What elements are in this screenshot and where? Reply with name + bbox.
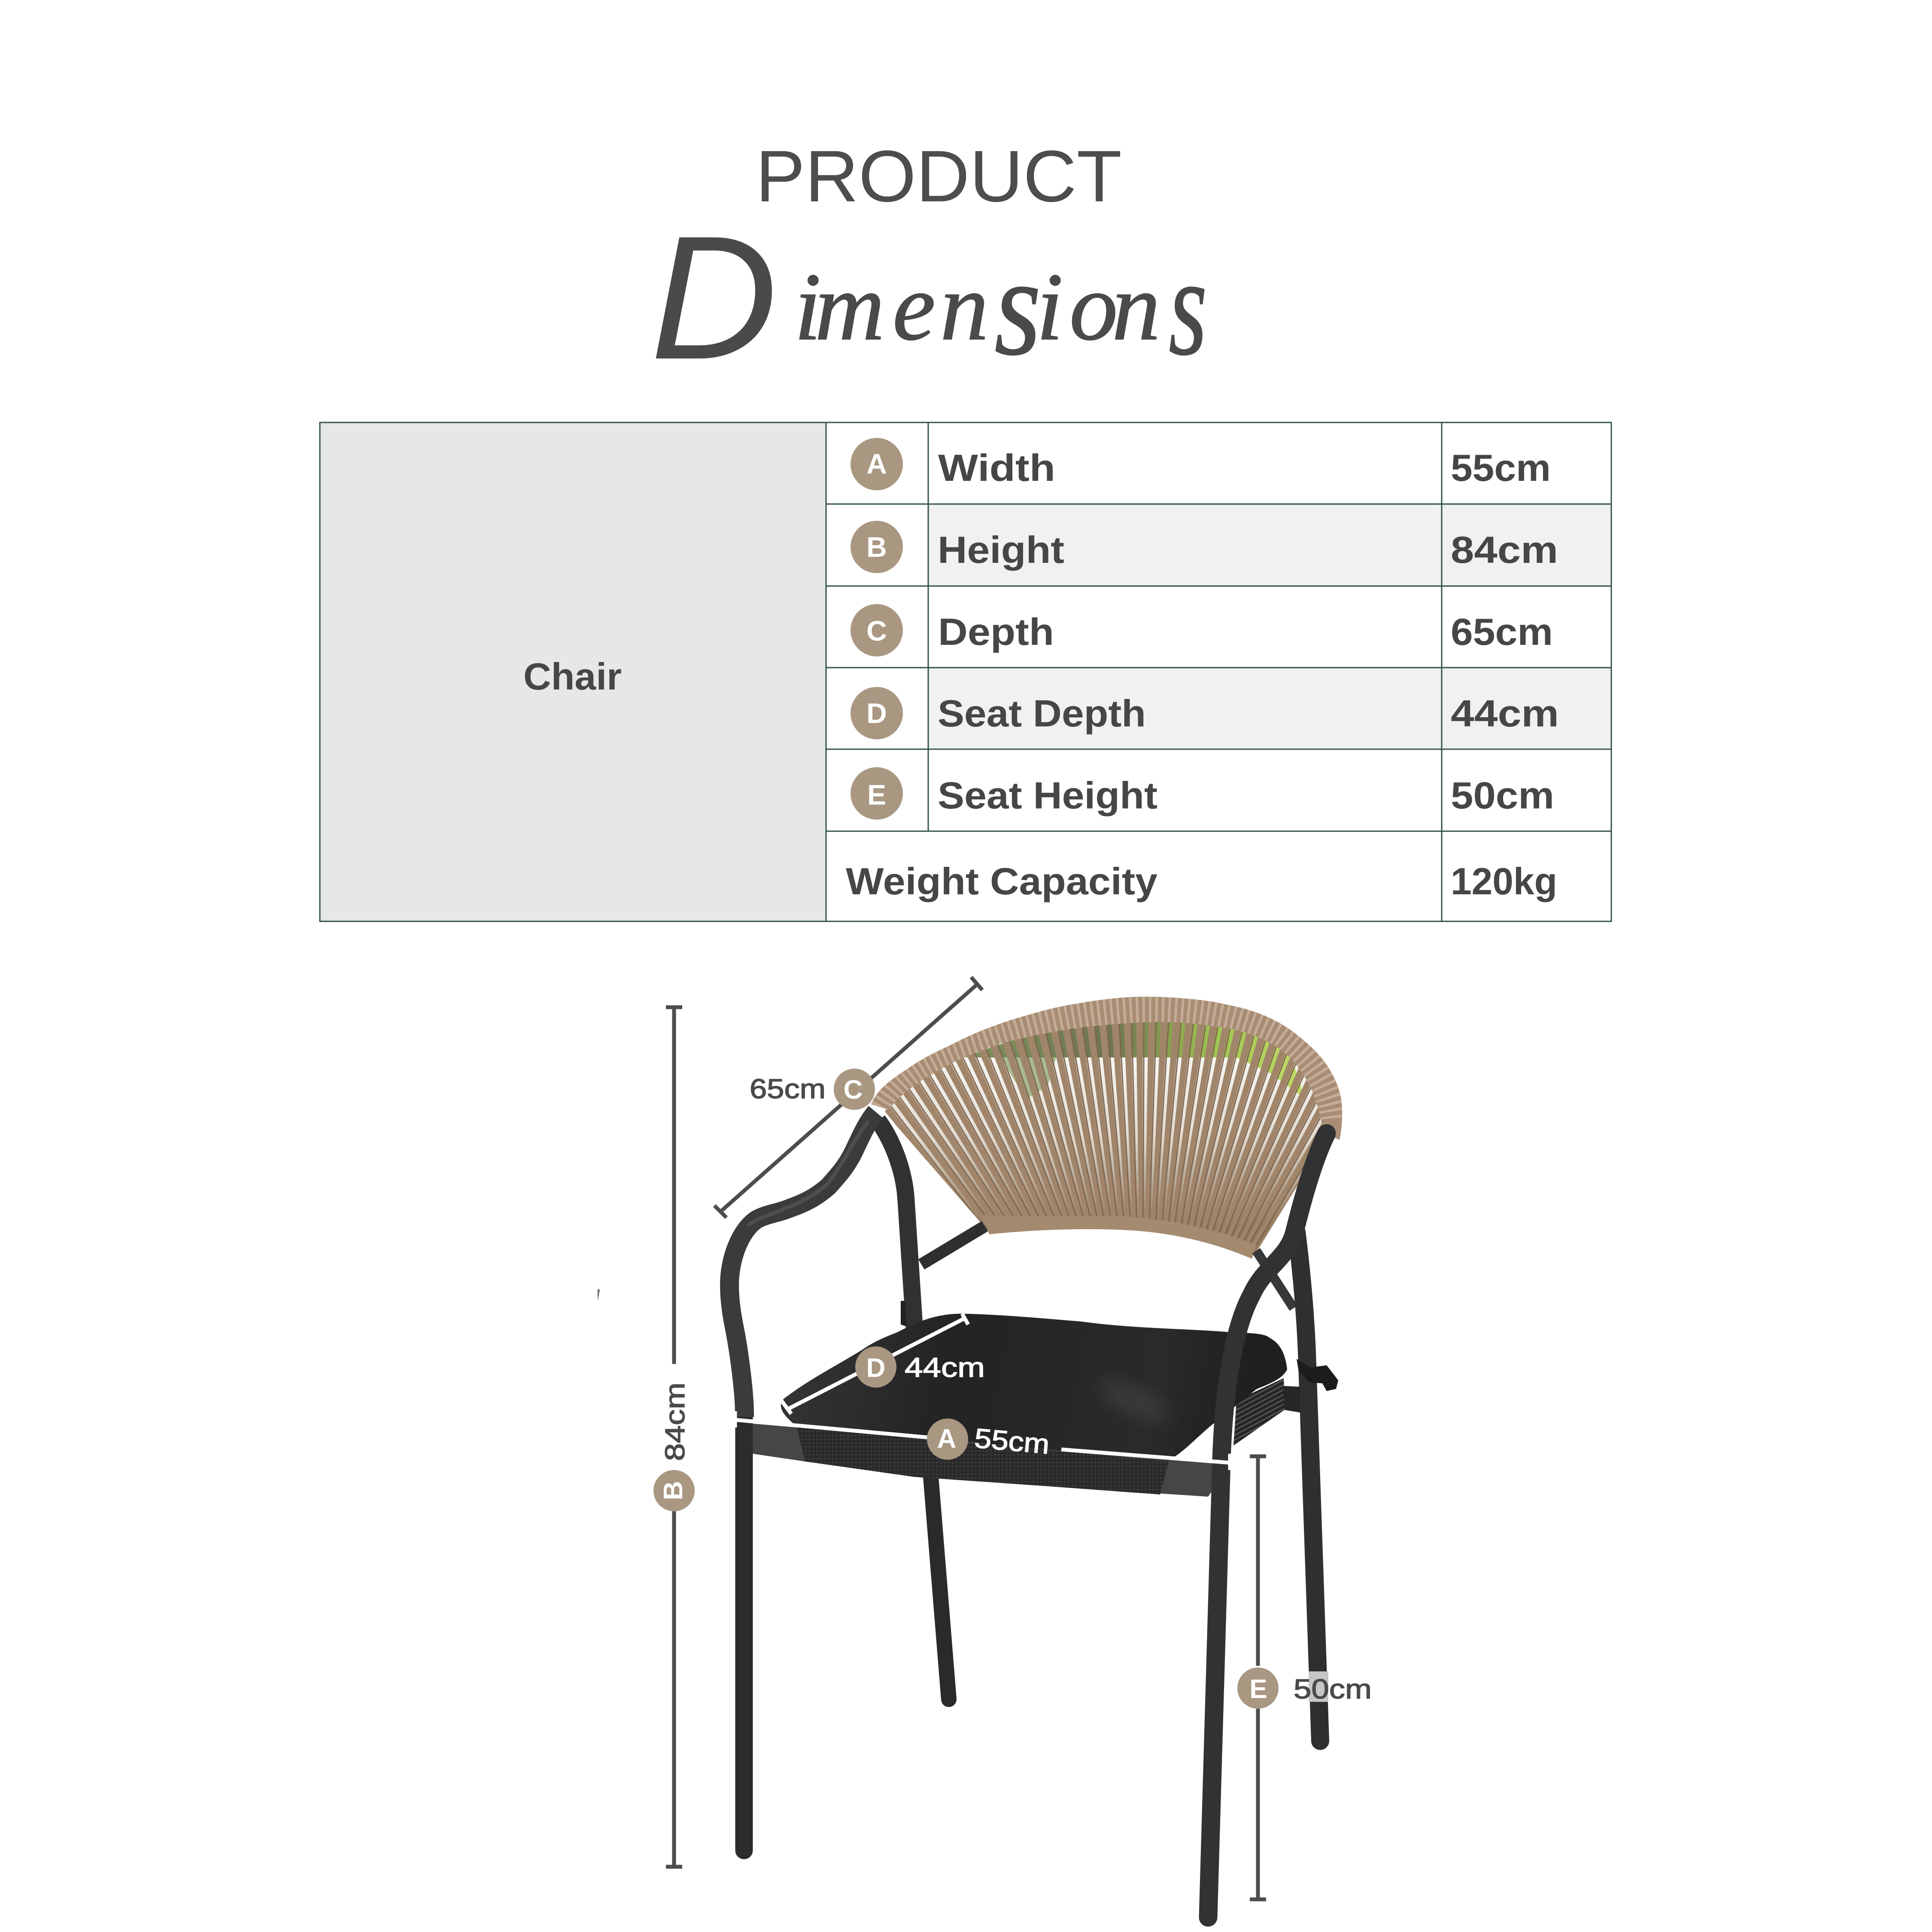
label Seat Depth: Seat Depth [938,692,1146,735]
script letters ion: i [1036,253,1063,360]
badge B [851,521,903,573]
row: Weight Capacity [846,860,1557,902]
cushion highlight [1094,1373,1173,1428]
badge C [851,604,903,656]
badge B: B [866,531,887,563]
script letters imen: n [940,253,988,360]
seat side mesh [1233,1378,1285,1446]
seat depth value: 44cm [905,1352,985,1383]
seat front mesh [796,1426,1169,1495]
panel: dimensions table [320,422,1611,921]
badge E [851,767,903,820]
left arm highlight [749,1123,867,1224]
seat height line [1250,1456,1266,1899]
chair backrest [871,997,1342,1259]
script letters imen: e [893,253,936,360]
value backing [1309,1671,1328,1702]
seat height value: 50cm [1294,1674,1372,1704]
rear frame [878,1121,1320,1741]
script final s: s [1169,228,1207,385]
dimension D: seat depth [781,1314,985,1414]
dimension B: height [653,1007,695,1867]
right strap [1297,1359,1338,1391]
script letters imen: i [794,253,821,360]
value 55cm: 55cm [1451,447,1551,489]
right brace [1256,1251,1294,1308]
stray mark [598,1289,600,1300]
width line [735,1411,1230,1470]
script letters ion: o [1069,253,1118,360]
value 50cm: 50cm [1451,774,1554,817]
label Width: Width [938,447,1055,489]
height line [666,1007,682,1867]
value 65cm: 65cm [1451,611,1553,653]
left strap [901,1301,907,1327]
value 120kg: 120kg [1451,860,1557,902]
height badge [653,1470,695,1511]
illustration: chair [729,987,1400,1917]
left rear leg [931,1477,949,1699]
width badge: A [937,1424,956,1454]
badge E: E [867,779,886,811]
backrest rope fan [885,1022,1322,1256]
value 44cm: 44cm [1451,692,1559,735]
script letters ion: n [1112,253,1160,360]
label Depth: Depth [938,611,1054,653]
depth line [714,977,982,1218]
height badge: B [659,1481,688,1500]
badge D: D [866,697,887,729]
row: Seat Depth [851,687,1559,739]
left rear post [878,1121,914,1329]
badge D [851,687,903,739]
script capital D: D [650,199,778,396]
dimension A: width [735,1411,1230,1470]
label Seat Height: Seat Height [938,774,1157,817]
table grid [320,422,1611,921]
title: Dimensions script [650,199,1207,396]
dimension C: depth [714,977,982,1218]
depth value: 65cm [750,1073,826,1104]
label Height: Height [938,529,1064,571]
row shading: Seat Depth [928,668,1611,749]
seat depth badge: D [866,1353,885,1383]
value 84cm: 84cm [1451,529,1558,571]
left front leg [735,1413,753,1850]
script letter s: s [994,228,1041,385]
panel: product name cell [320,422,826,921]
left brace [921,1226,985,1264]
left arm [729,1112,876,1417]
label: Chair: Chair [523,655,622,698]
badge A [851,438,903,490]
depth badge: C [844,1075,863,1105]
row: Height [851,521,1558,573]
height value: 84cm [659,1382,690,1461]
row: Depth [851,604,1553,656]
row: Seat Height [851,767,1554,820]
right front leg and arm [1208,1133,1327,1917]
seat cushion [781,1314,1287,1461]
width badge [927,1419,968,1460]
depth badge [834,1069,875,1110]
front frame [729,1112,1327,1917]
seat frame panel [748,1423,1230,1497]
row shading: Height [928,504,1611,586]
dimension E: seat height [1237,1456,1372,1899]
seat depth line [781,1314,968,1414]
seat side tab [1283,1386,1300,1413]
width value: 55cm [973,1422,1051,1460]
backrest top rim [871,997,1342,1140]
seat height badge: E [1249,1674,1267,1704]
label Weight Capacity: Weight Capacity [846,860,1157,902]
title: PRODUCT: PRODUCT [756,136,1122,217]
row: Width [851,438,1551,490]
seat height badge [1237,1668,1279,1709]
seat depth badge [855,1346,896,1388]
badge A: A [866,448,887,480]
backrest bottom band [983,1215,1256,1259]
badge C: C [866,615,887,647]
script letters imen: m [815,253,884,360]
right rear post and leg [1297,1232,1320,1741]
backrest backdrop [884,1022,1321,1256]
